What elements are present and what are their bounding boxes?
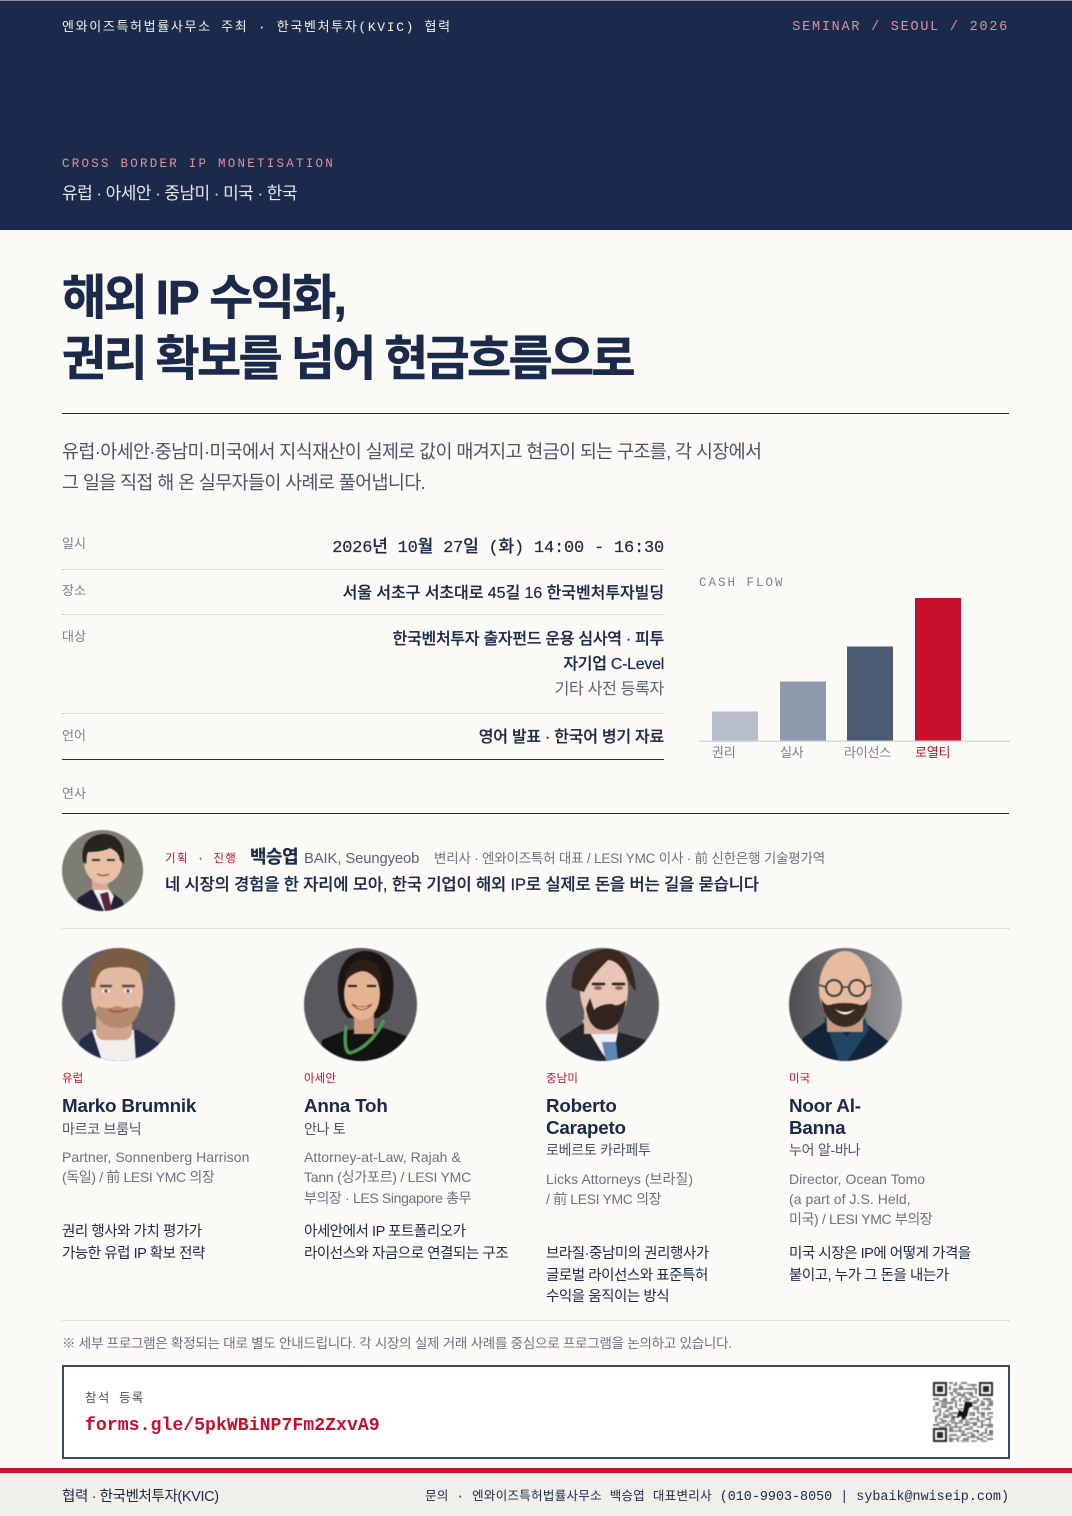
affiliation: Director, Ocean Tomo <box>789 1171 925 1187</box>
registration label: 참석 등록 <box>85 1392 145 1406</box>
Korean name: 누어 알-바나 <box>789 1142 860 1158</box>
affiliation <box>62 1149 249 1185</box>
speaker: ASEAN <box>303 947 508 1262</box>
topic <box>62 1224 205 1262</box>
title: 해외 IP 수익화, <box>62 272 344 325</box>
photo: Marko Brumnik <box>61 947 176 1062</box>
affiliation: Licks Attorneys (브라질) <box>546 1171 693 1187</box>
Korean name: 안나 토 <box>304 1121 346 1137</box>
speaker: Latin America <box>545 947 709 1305</box>
registration box <box>62 1365 1010 1459</box>
registration link: forms.gle/5pkWBiNP7Fm2ZxvA9 <box>85 1416 380 1436</box>
affiliation: 미국) / LESI YMC 부의장 <box>789 1211 932 1227</box>
region tag: 유럽 <box>62 1073 83 1085</box>
topic <box>546 1246 709 1305</box>
eyebrow: CROSS BORDER IP MONETISATION <box>62 157 335 171</box>
topic: 수익을 움직이는 방식 <box>546 1289 669 1305</box>
affiliation: Attorney-at-Law, Rajah & <box>304 1148 461 1164</box>
event details table <box>62 536 664 760</box>
host bio: 변리사 · 엔와이즈특허 대표 / LESI YMC 이사 · 前 신한은행 기술평가역 <box>434 851 825 866</box>
bar label licence: 라이선스 <box>844 745 891 760</box>
bar label royalty: 로열티 <box>915 745 950 760</box>
header band <box>0 0 1072 230</box>
title <box>62 272 634 386</box>
affiliation: (독일) / 前 LESI YMC 의장 <box>62 1169 214 1185</box>
host text <box>165 847 825 894</box>
photo: Noor Al-Banna <box>788 947 903 1062</box>
affiliation <box>789 1171 932 1227</box>
lead paragraph: 그 일을 직접 해 온 실무자들이 사례로 풀어냅니다. <box>62 472 425 493</box>
topic: 브라질·중남미의 권리행사가 <box>546 1246 709 1262</box>
host name: 백승엽 <box>250 847 298 867</box>
cash flow chart <box>699 576 1010 760</box>
affiliation: (a part of J.S. Held, <box>789 1191 911 1207</box>
audience value: 한국벤처투자 출자펀드 운용 심사역 · 피투 <box>393 631 664 648</box>
lead paragraph <box>62 441 761 493</box>
speaker: Europe <box>61 947 249 1262</box>
date value: 2026년 10월 27일 (화) 14:00 - 16:30 <box>332 539 664 558</box>
speakers rule <box>62 813 1009 814</box>
Korean name: 로베르토 카라페투 <box>546 1142 651 1158</box>
seminar tag: SEMINAR / SEOUL / 2026 <box>792 20 1009 35</box>
lead paragraph: 유럽·아세안·중남미·미국에서 지식재산이 실제로 값이 매겨지고 현금이 되는 구조를, 각 시장에서 <box>62 441 761 462</box>
region tag: 미국 <box>789 1073 810 1085</box>
name: Noor Al- <box>789 1095 861 1116</box>
name: Marko Brumnik <box>62 1095 196 1116</box>
Korean name: 마르코 브룸닉 <box>62 1121 141 1137</box>
topic: 가능한 유럽 IP 확보 전략 <box>62 1246 205 1262</box>
date label: 일시 <box>62 536 86 551</box>
affiliation: 부의장 · LES Singapore 총무 <box>304 1190 471 1206</box>
bars <box>699 598 1010 742</box>
partner: 협력 · 한국벤처투자(KVIC) <box>62 1489 219 1505</box>
speaker: USA <box>788 947 971 1284</box>
audience value: 자기업 C-Level <box>563 656 664 673</box>
host role: 기획 · 진행 <box>165 853 237 866</box>
topic: 아세안에서 IP 포트폴리오가 <box>304 1224 465 1240</box>
program note: ※ 세부 프로그램은 확정되는 대로 별도 안내드립니다. 각 시장의 실제 거래 사례를 중심으로 프로그램을 논의하고 있습니다. <box>62 1336 732 1351</box>
affiliation <box>304 1148 471 1206</box>
affiliation: Partner, Sonnenberg Harrison <box>62 1149 249 1165</box>
affiliation: / 前 LESI YMC 의장 <box>546 1191 661 1207</box>
bar label enforcement: 실사 <box>780 745 804 760</box>
affiliation <box>546 1171 693 1207</box>
name: Carapeto <box>546 1117 626 1138</box>
topic: 붙이고, 누가 그 돈을 내는가 <box>789 1268 949 1284</box>
region tag: 중남미 <box>546 1073 578 1085</box>
title: 권리 확보를 넘어 현금흐름으로 <box>62 333 633 386</box>
QR code <box>932 1381 994 1443</box>
photo: Roberto Carapeto <box>545 947 660 1062</box>
topic: 라이선스와 자금으로 연결되는 구조 <box>304 1246 508 1262</box>
venue value: 서울 서초구 서초대로 45길 16 한국벤처투자빌딩 <box>343 585 664 602</box>
audience label: 대상 <box>62 629 86 644</box>
name <box>789 1095 861 1138</box>
host romanised name: BAIK, Seungyeob <box>304 851 419 867</box>
host line: 엔와이즈특허법률사무소 주최 · 한국벤처투자(KVIC) 협력 <box>62 20 452 35</box>
topic: 글로벌 라이선스와 표준특허 <box>546 1268 708 1284</box>
footer <box>0 1468 1072 1516</box>
title rule <box>62 413 1009 414</box>
name: Anna Toh <box>304 1095 388 1116</box>
affiliation: Tann (싱가포르) / LESI YMC <box>304 1169 471 1185</box>
regions line: 유럽 · 아세안 · 중남미 · 미국 · 한국 <box>62 184 297 203</box>
topic: 권리 행사와 가치 평가가 <box>62 1224 202 1240</box>
host statement: 네 시장의 경험을 한 자리에 모아, 한국 기업이 해외 IP로 실제로 돈을 버는 길을 묻습니다 <box>165 876 759 894</box>
audience value: 기타 사전 등록자 <box>555 681 664 698</box>
bar label rights: 권리 <box>712 745 736 760</box>
language value: 영어 발표 · 한국어 병기 자료 <box>479 729 664 746</box>
region tag: 아세안 <box>304 1073 336 1085</box>
topic <box>789 1246 971 1284</box>
name <box>546 1095 626 1138</box>
topic <box>304 1224 508 1262</box>
photo: host <box>61 829 144 912</box>
contact: 문의 · 엔와이즈특허법률사무소 백승엽 대표변리사 (010-9903-8050 | sybaik@nwiseip.com) <box>425 1490 1009 1505</box>
language label: 언어 <box>62 728 86 743</box>
topic: 미국 시장은 IP에 어떻게 가격을 <box>789 1246 971 1262</box>
chart label: CASH FLOW <box>699 576 785 590</box>
speakers label: 연사 <box>62 786 86 801</box>
name: Roberto <box>546 1095 617 1116</box>
audience value <box>393 630 664 698</box>
venue label: 장소 <box>62 583 86 598</box>
name: Banna <box>789 1117 845 1138</box>
photo: Anna Toh <box>303 947 418 1062</box>
